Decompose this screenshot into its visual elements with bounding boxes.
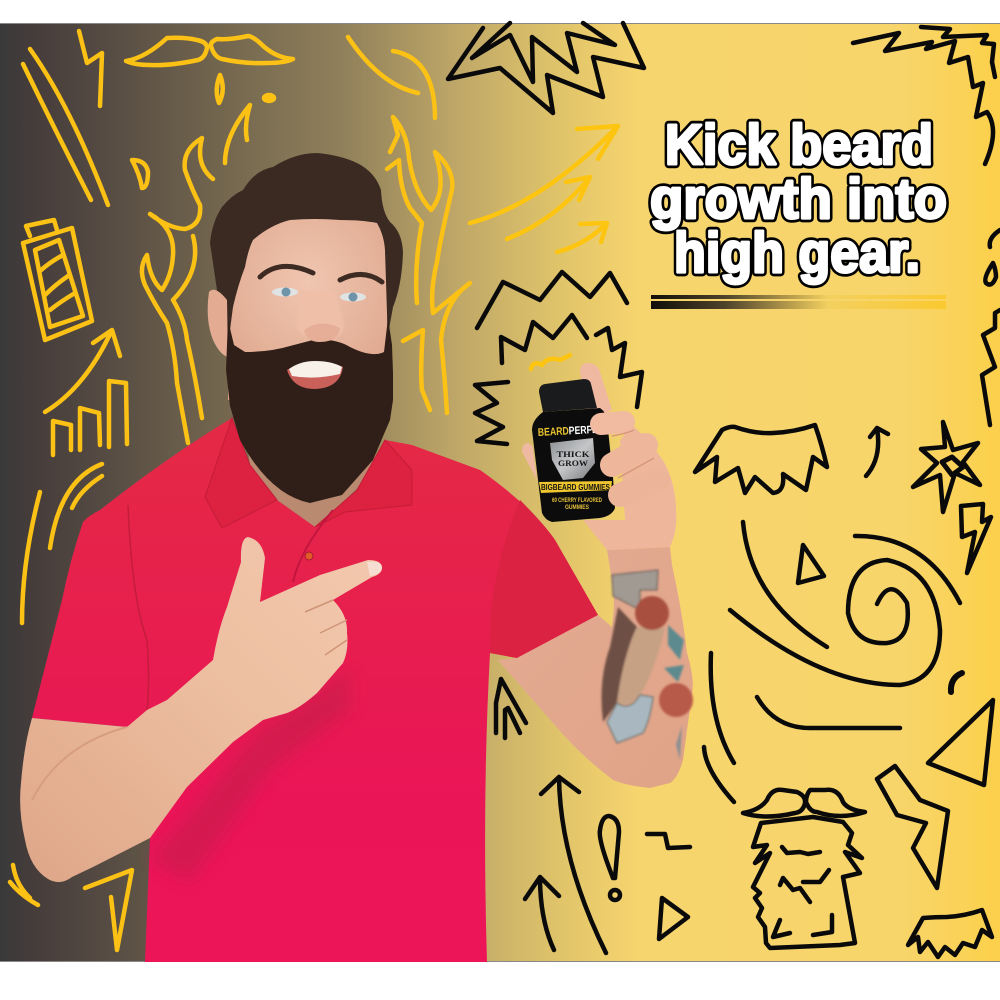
finger lines [305,600,347,655]
thumb and back finger behind bottle [522,363,612,480]
beard and moustache [226,318,393,503]
hand fingers [601,422,658,495]
doodle: curved strokes lower left [10,464,132,950]
headline fill layer: Kick beard [665,113,933,177]
cheek and nose shading [296,290,344,342]
tattoo ribbon [612,570,658,610]
left arm [20,537,382,882]
shirt placket [293,510,333,582]
shirt collar [205,418,412,528]
tattoo tan shape [617,627,665,704]
nose tip [304,323,340,342]
neck [240,400,378,527]
doodle: small arrow and star [866,422,991,573]
ear [208,290,228,357]
black doodles on light side [448,23,1000,957]
right arm [498,547,693,788]
doodle: right triangle and bolts [877,700,993,888]
beard label [550,438,595,480]
doodle: long slashes top left [23,31,108,205]
doodle: flame around head right [348,37,470,413]
head hair [210,153,403,340]
headline [650,113,947,285]
tattoo leaves [664,625,684,682]
bottle cap [539,379,597,412]
brand name: BEARDPERFE [538,424,598,439]
tattoo lower line [676,725,682,760]
red polo shirt [32,418,598,962]
label text: THICK [556,450,590,459]
yellow doodles on dark side [10,31,470,950]
doodle: spiral with triangles [730,522,962,728]
doodle: flame around head left [132,138,213,443]
yellow band [539,481,612,493]
headline outline layer: high gear. [674,221,920,285]
headline fill layer: growth into [650,167,947,231]
headline outline layer: growth into [650,167,947,231]
bottle body [532,408,615,522]
headline underline rule [651,295,946,309]
headline outline layer [650,113,947,285]
headline fill layer: high gear. [674,221,920,285]
doodle: tall arrows and exclamation [525,777,690,953]
doodle: zigzag waves around bottle [475,272,642,444]
doodle: lower curves [496,653,734,802]
tattoo dark shape [602,607,637,722]
person [20,153,693,962]
headline fill layer [650,113,947,285]
count text: 60 CHERRY FLAVORED [552,498,602,504]
doodle: moustache bottom right [908,910,992,957]
doodle: moustache right [695,425,827,493]
smile mouth [287,361,343,389]
arrows in center gold [470,126,618,369]
shadow under forearm [150,670,350,880]
doodle: growth arrow and bars [45,330,127,455]
doodle: yellow squiggle [531,355,570,369]
doodle: explosion top center [448,23,644,113]
face [228,219,389,400]
bottle: GUMMIES [565,505,589,511]
bottle [532,379,615,522]
tattoo blue shape [607,695,653,743]
left arm crease [32,727,127,800]
band text: BIGBEARD GUMMIES [541,483,611,492]
right sleeve [490,500,598,658]
doodle: battery [23,220,92,340]
finger separators [612,430,654,478]
tattoo roses [635,596,669,630]
hand palm [583,425,676,550]
doodle: squiggle top right [853,27,1000,425]
left sleeve seam [128,505,148,710]
doodle: bearded face bottom [743,790,865,948]
doodle: moustache top [126,36,293,163]
headline outline layer: Kick beard [665,113,933,177]
bottle: GROW [558,459,588,468]
tattoo sleeve [602,570,693,760]
eyes [260,266,382,302]
shirt button [305,552,313,560]
fingernail [367,562,382,576]
